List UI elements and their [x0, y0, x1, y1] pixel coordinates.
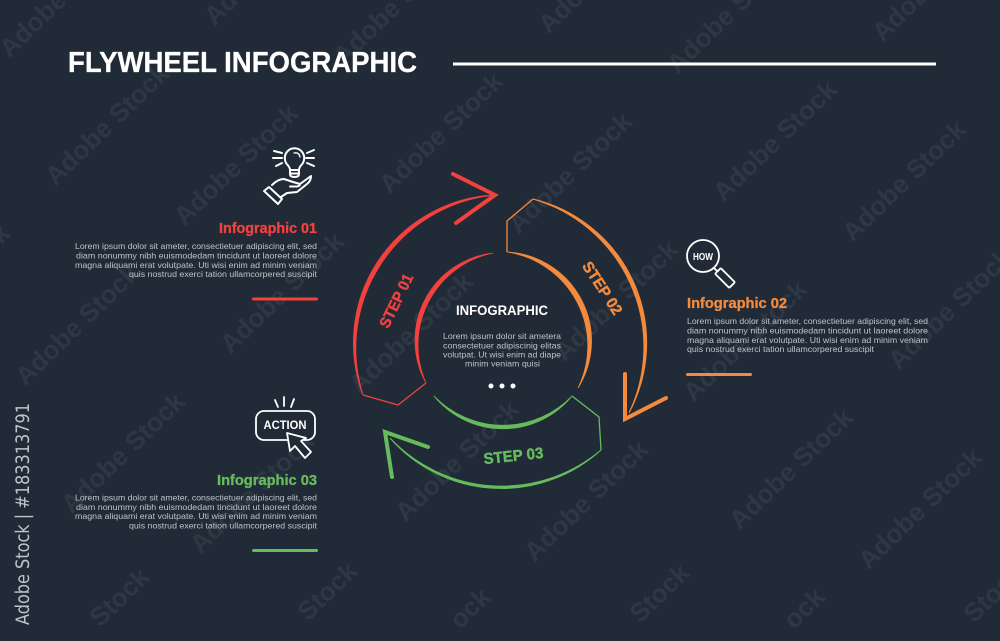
flywheel segment: step 01 [354, 174, 495, 405]
center body copy: volutpat. Ut wisi enim ad diape [443, 350, 561, 360]
watermark pattern: Stock [623, 557, 695, 628]
heading: infographic 02: Infographic 02 [687, 296, 787, 312]
step 03 tail [572, 396, 601, 450]
watermark pattern: ock [443, 581, 497, 634]
accent line: infographic 02 [686, 373, 752, 376]
body text: infographic 03: quis nostrud exerci tation ullamcorpered suscipit [129, 520, 318, 530]
step 01 label: STEP 01 [377, 271, 417, 331]
body text: infographic 01 [75, 241, 318, 279]
side credit text: Adobe Stock | #183313791 [13, 403, 34, 625]
step 02 inner arc [507, 252, 591, 388]
step 01 inner arc [415, 253, 493, 383]
body text: infographic 01: magna aliquami erat volutpate. Uti wisi enim ad minim veniam [75, 260, 317, 270]
watermark pattern: ock [777, 581, 831, 634]
step 02 label: STEP 02 [578, 259, 625, 318]
watermark pattern: Adobe Stock [836, 114, 972, 247]
center body copy: consectetuer adipiscinig elitas [443, 340, 561, 350]
step 03 arrowhead [385, 432, 428, 477]
flywheel segment: step 02 [507, 199, 666, 419]
body text: infographic 01: Lorem ipsum dolor sit ameter, consectietuer adipiscing elit, sed [75, 241, 317, 251]
title: FLYWHEEL INFOGRAPHIC [68, 47, 417, 79]
ellipsis dots [488, 384, 516, 388]
watermark pattern: Adobe Stock [723, 402, 859, 535]
step 01 arrowhead [453, 174, 495, 223]
watermark pattern: Adobe Stock [184, 426, 320, 559]
flywheel segment: step 03 [385, 396, 601, 489]
body text: infographic 02: diam nonummy nibh euismodedam tincidunt ut laoreet dolore [687, 326, 928, 336]
body text: infographic 02 [687, 316, 928, 354]
icon: action button with cursor [256, 397, 315, 458]
watermark pattern: Adobe Stock [9, 258, 145, 391]
step 02 tail [507, 199, 533, 252]
watermark pattern: Stock [291, 555, 363, 626]
body text: infographic 03: magna aliquami erat volutpate. Uti wisi enim ad minim veniam [75, 511, 317, 521]
step 03 label: STEP 03 [483, 445, 545, 468]
accent line: infographic 01 [252, 298, 318, 300]
watermark pattern: Adobe Stock [39, 58, 175, 191]
watermark pattern: Adobe Stock [548, 234, 684, 367]
icon: light bulb over hand [264, 148, 314, 204]
step 01 outer arc [354, 195, 495, 395]
watermark pattern: Adobe Stock [389, 394, 525, 527]
center text block [443, 303, 561, 388]
step 02 arrowhead [625, 374, 666, 419]
body text: infographic 02: magna aliquami erat volutpate. Uti wisi enim ad minim veniam [687, 335, 928, 345]
heading: infographic 03: Infographic 03 [217, 473, 317, 489]
panel: infographic 03 [75, 397, 318, 552]
icon: action button with cursor: ACTION [264, 420, 306, 432]
step 02 outer arc [533, 199, 647, 413]
watermark pattern: Adobe Stock [168, 98, 304, 231]
accent line: infographic 03 [252, 549, 318, 552]
center body copy [443, 331, 561, 368]
panel: infographic 02 [686, 240, 928, 376]
heading: infographic 01: Infographic 01 [219, 221, 317, 237]
icon: magnifier how: HOW [693, 252, 713, 263]
step 03 inner arc [434, 396, 572, 429]
step 01 tail [363, 383, 426, 405]
body text: infographic 03: diam nonummy nibh euismodedam tincidunt ut laoreet dolore [76, 502, 317, 512]
body text: infographic 01: quis nostrud exerci tation ullamcorpered suscipit [129, 269, 318, 279]
body text: infographic 03: Lorem ipsum dolor sit ameter, consectietuer adipiscing elit, sed [75, 492, 317, 502]
watermark pattern: Adobe Stock [214, 226, 350, 359]
panel: infographic 01 [75, 148, 318, 300]
watermark pattern: Adobe Stock [55, 386, 191, 519]
body text: infographic 01: diam nonummy nibh euismodedam tincidunt ut laoreet dolore [76, 250, 317, 260]
body text: infographic 02: Lorem ipsum dolor sit ameter, consectietuer adipiscing elit, sed [687, 316, 928, 326]
title rule [453, 62, 936, 66]
center body copy: minim veniam quisi [465, 358, 540, 368]
body text: infographic 02: quis nostrud exerci tation ullamcorpered suscipit [687, 344, 875, 354]
center body copy: Lorem ipsum dolor sit ametera [443, 331, 561, 341]
watermark pattern: Adobe Stock [852, 442, 988, 575]
center heading: INFOGRAPHIC [456, 303, 548, 318]
watermark pattern: Adobe Stock [518, 434, 654, 567]
step 03 outer arc [390, 438, 601, 489]
watermark pattern: Adobe Stock [677, 274, 813, 407]
watermark pattern: Adobe Stock [502, 106, 638, 239]
watermark pattern: Adobe Stock [343, 266, 479, 399]
watermark pattern: Adobe Stock [373, 66, 509, 199]
watermark pattern: Adobe Stock [707, 74, 843, 207]
icon: magnifier how [687, 240, 735, 288]
body text: infographic 03 [75, 492, 318, 530]
watermark pattern: Stock [83, 561, 155, 632]
